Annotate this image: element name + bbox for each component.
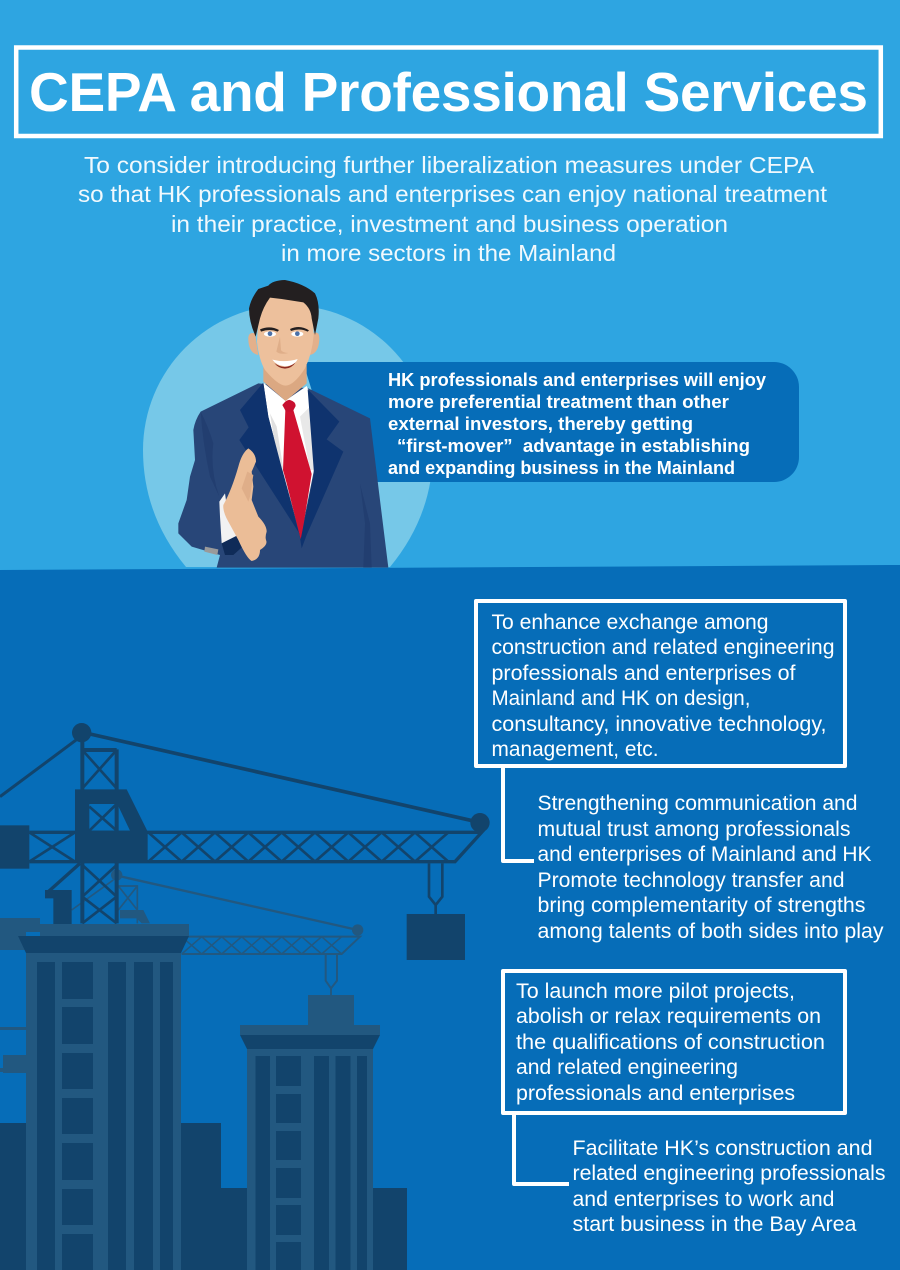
businessman illustration bbox=[178, 280, 388, 568]
background circle bbox=[143, 305, 433, 567]
subtitle text: To consider introducing further liberalization measures under CEPA bbox=[84, 152, 815, 178]
subtitle text: so that HK professionals and enterprises can enjoy national treatment bbox=[78, 181, 828, 207]
bubble text: external investors, thereby getting bbox=[388, 414, 693, 434]
panel: pilot projects bbox=[503, 971, 845, 1113]
text: facilitate HK professionals: and enterprises to work and bbox=[572, 1187, 834, 1211]
panel text: professionals and enterprises bbox=[516, 1081, 795, 1105]
text: strengthening communication: Strengthening communication and bbox=[538, 791, 858, 815]
panel text: management, etc. bbox=[492, 737, 658, 761]
shirt cuff bbox=[219, 493, 238, 543]
panel: construction exchange bbox=[476, 601, 845, 766]
tie bbox=[282, 400, 312, 541]
bubble text: more preferential treatment than other bbox=[388, 392, 729, 412]
text: strengthening communication bbox=[538, 791, 884, 943]
nose bbox=[276, 337, 288, 354]
title: CEPA and Professional Services bbox=[29, 61, 868, 123]
text: strengthening communication: and enterprises of Mainland and HK bbox=[538, 842, 872, 866]
short building bbox=[240, 995, 380, 1270]
face bbox=[257, 292, 314, 386]
panel text: Mainland and HK on design, bbox=[492, 686, 750, 710]
panel text bbox=[516, 979, 825, 1105]
large crane bbox=[0, 723, 490, 960]
left edge structures bbox=[0, 918, 40, 1073]
text: facilitate HK professionals: start business in the Bay Area bbox=[572, 1212, 857, 1236]
panel text: and related engineering bbox=[516, 1055, 738, 1079]
sleeve opening bbox=[222, 535, 243, 555]
ears bbox=[248, 333, 258, 355]
subtitle text bbox=[78, 152, 828, 266]
lapels bbox=[239, 383, 343, 548]
panel text: abolish or relax requirements on bbox=[516, 1004, 821, 1028]
mouth bbox=[272, 359, 298, 366]
panel text: professionals and enterprises of bbox=[492, 661, 796, 685]
panel text bbox=[492, 610, 834, 761]
bubble text: “first-mover” advantage in establishing bbox=[397, 436, 750, 456]
panel text: the qualifications of construction bbox=[516, 1030, 825, 1054]
text: facilitate HK professionals bbox=[572, 1136, 886, 1236]
background buildings bbox=[0, 1123, 407, 1270]
text: strengthening communication: Promote technology transfer and bbox=[538, 868, 844, 892]
hand bbox=[223, 448, 267, 561]
text: strengthening communication: among talents of both sides into play bbox=[538, 919, 884, 943]
connector line bbox=[503, 768, 534, 861]
text: facilitate HK professionals: related engineering professionals bbox=[572, 1161, 886, 1185]
head bbox=[248, 280, 319, 401]
neck bbox=[263, 365, 307, 401]
panel text: construction and related engineering bbox=[492, 635, 834, 659]
subtitle text: in more sectors in the Mainland bbox=[281, 240, 616, 266]
panel text: To launch more pilot projects, bbox=[516, 979, 795, 1003]
text: strengthening communication: mutual trust among professionals bbox=[538, 817, 850, 841]
illustration: cranes and buildings bbox=[0, 723, 490, 1270]
hand shading bbox=[242, 472, 253, 502]
hair bbox=[249, 280, 319, 337]
shirt bbox=[263, 383, 314, 537]
connector line bbox=[514, 1115, 569, 1184]
small crane bbox=[72, 869, 363, 996]
bubble text bbox=[388, 370, 766, 478]
title bbox=[16, 48, 881, 136]
tall building bbox=[18, 924, 189, 1270]
text: facilitate HK professionals: Facilitate HK’s construction and bbox=[572, 1136, 872, 1160]
speech bubble bbox=[303, 362, 799, 482]
subtitle text: in their practice, investment and business operation bbox=[171, 211, 728, 237]
eyes and brows bbox=[260, 327, 309, 337]
panel text: To enhance exchange among bbox=[492, 610, 768, 634]
hand and cuff bbox=[204, 448, 267, 561]
bubble text: HK professionals and enterprises will enjoy bbox=[388, 370, 766, 390]
suit bbox=[178, 383, 388, 568]
bubble text: and expanding business in the Mainland bbox=[388, 458, 735, 478]
text: strengthening communication: bring complementarity of strengths bbox=[538, 893, 866, 917]
lower section background bbox=[0, 565, 900, 1270]
panel text: consultancy, innovative technology, bbox=[492, 712, 826, 736]
sleeve buttons bbox=[204, 547, 218, 555]
